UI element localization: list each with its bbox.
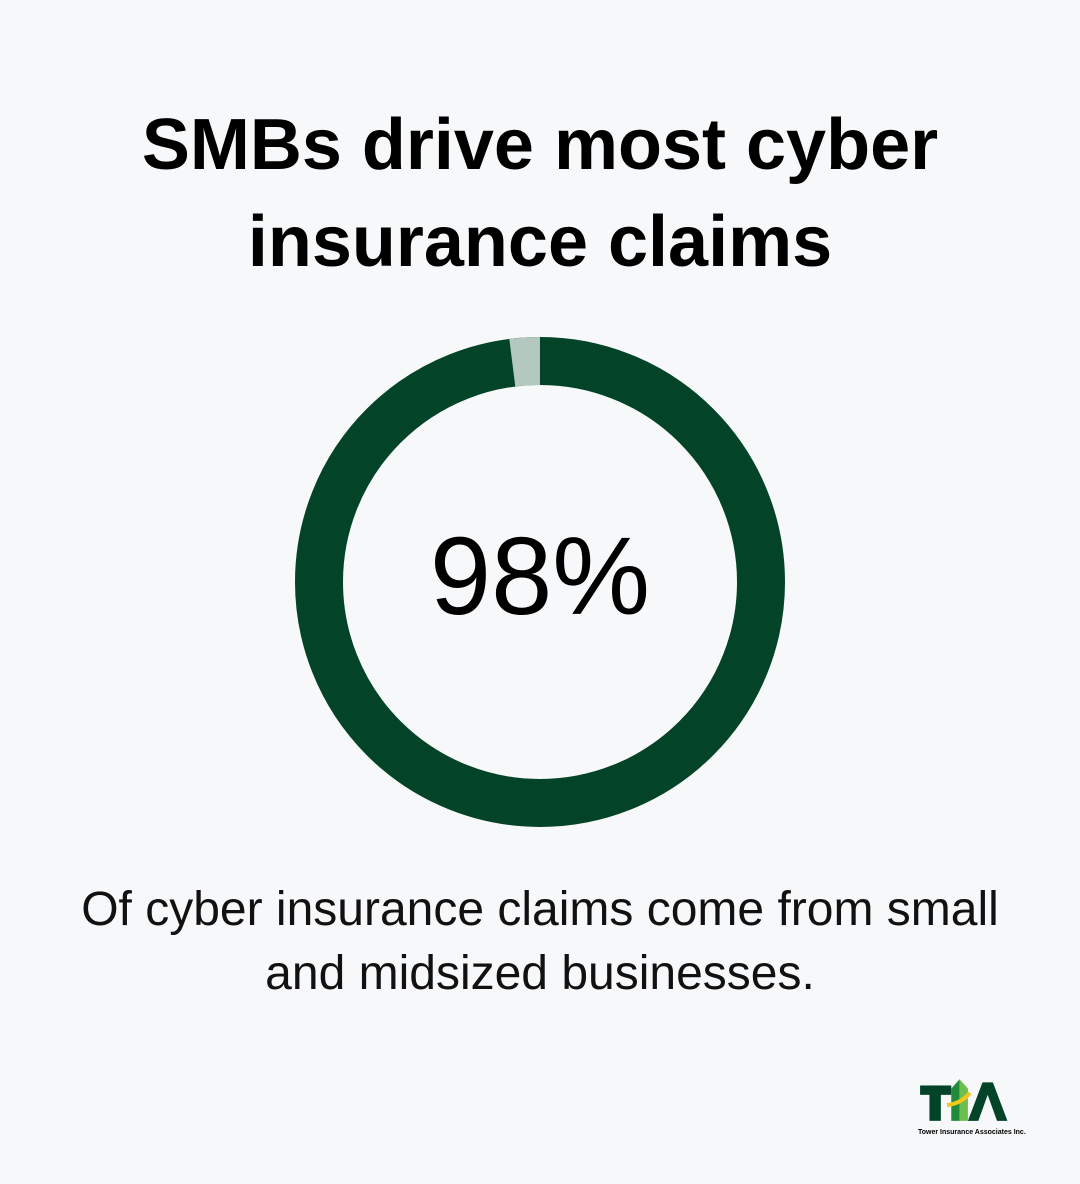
description: Of cyber insurance claims come from small	[81, 883, 999, 936]
logo: Tower Insurance Associates Inc.	[918, 1129, 1026, 1136]
description	[81, 883, 999, 1000]
logo	[918, 1079, 1026, 1136]
description: and midsized businesses.	[265, 947, 815, 1000]
title	[142, 105, 938, 282]
title: insurance claims	[248, 202, 832, 282]
donut chart: 98%	[430, 515, 650, 638]
title: SMBs drive most cyber	[142, 105, 938, 185]
